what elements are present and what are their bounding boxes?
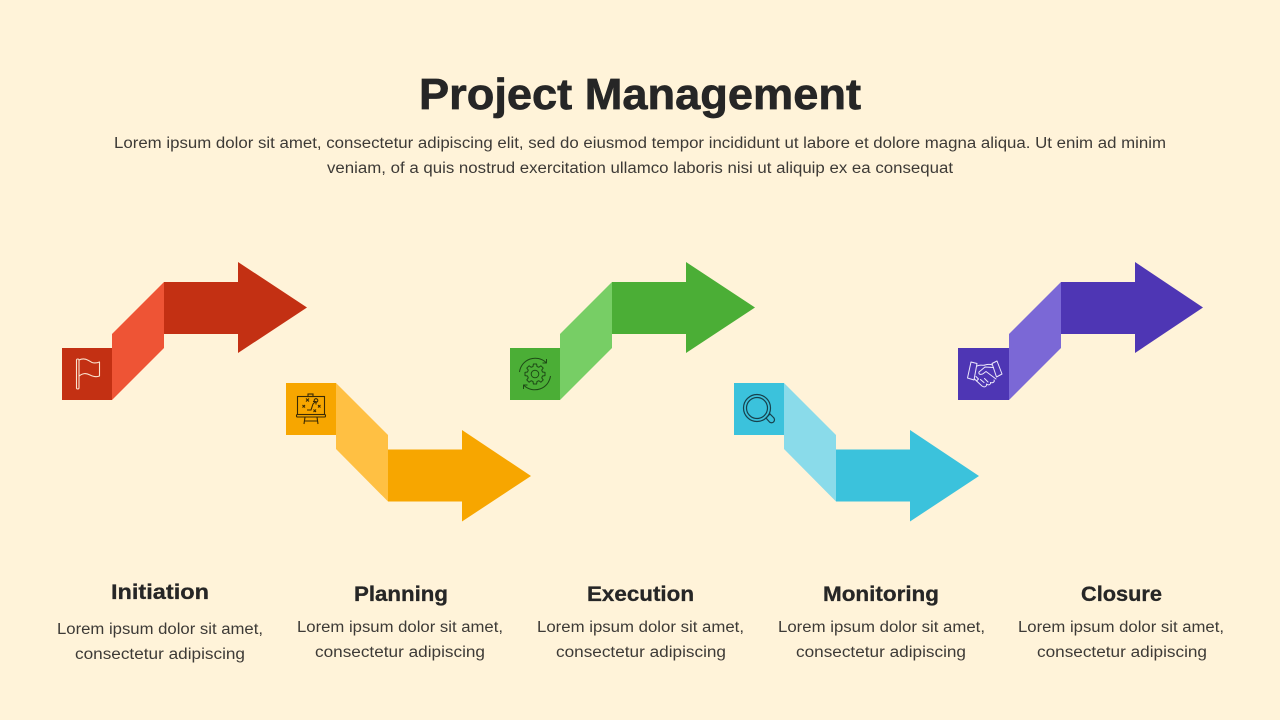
label: closure: Closure <box>1081 583 1162 606</box>
icon: magnifier <box>744 394 775 423</box>
icon: strategy board <box>296 394 326 424</box>
label: closure <box>1018 583 1224 661</box>
label: execution: consectetur adipiscing <box>556 644 726 661</box>
label: monitoring: Monitoring <box>823 583 939 606</box>
icon: flag <box>76 359 100 389</box>
icon: gear cycle <box>520 358 550 390</box>
label: monitoring: Lorem ipsum dolor sit amet, <box>778 619 985 636</box>
title: Project Management <box>419 70 861 119</box>
label: closure: consectetur adipiscing <box>1037 644 1207 661</box>
label: monitoring <box>778 583 985 661</box>
arrow: execution <box>510 262 755 400</box>
label: initiation: Lorem ipsum dolor sit amet, <box>57 621 263 638</box>
label: execution: Lorem ipsum dolor sit amet, <box>537 619 744 636</box>
label: initiation: consectetur adipiscing <box>75 646 245 663</box>
arrow: planning <box>286 383 531 522</box>
label: planning: Planning <box>354 583 448 606</box>
label: closure: Lorem ipsum dolor sit amet, <box>1018 619 1224 636</box>
arrow: initiation <box>62 262 307 400</box>
arrow: monitoring <box>734 383 979 522</box>
label: execution: Execution <box>587 583 694 606</box>
label: planning <box>297 583 503 661</box>
arrow: closure <box>958 262 1203 400</box>
icon: handshake <box>968 361 1002 387</box>
intro text: veniam, of a quis nostrud exercitation ullamco laboris nisi ut aliquip ex ea consequat <box>327 160 954 177</box>
label: planning: Lorem ipsum dolor sit amet, <box>297 619 503 636</box>
label: initiation: Initiation <box>111 581 209 604</box>
intro text: Lorem ipsum dolor sit amet, consectetur adipiscing elit, sed do eiusmod tempor incididunt ut labore et dolore magna aliqua. Ut enim ad minim <box>114 135 1166 152</box>
label: monitoring: consectetur adipiscing <box>796 644 966 661</box>
label: planning: consectetur adipiscing <box>315 644 485 661</box>
label: execution <box>537 583 744 661</box>
label: initiation <box>57 581 263 663</box>
intro text <box>114 135 1166 177</box>
